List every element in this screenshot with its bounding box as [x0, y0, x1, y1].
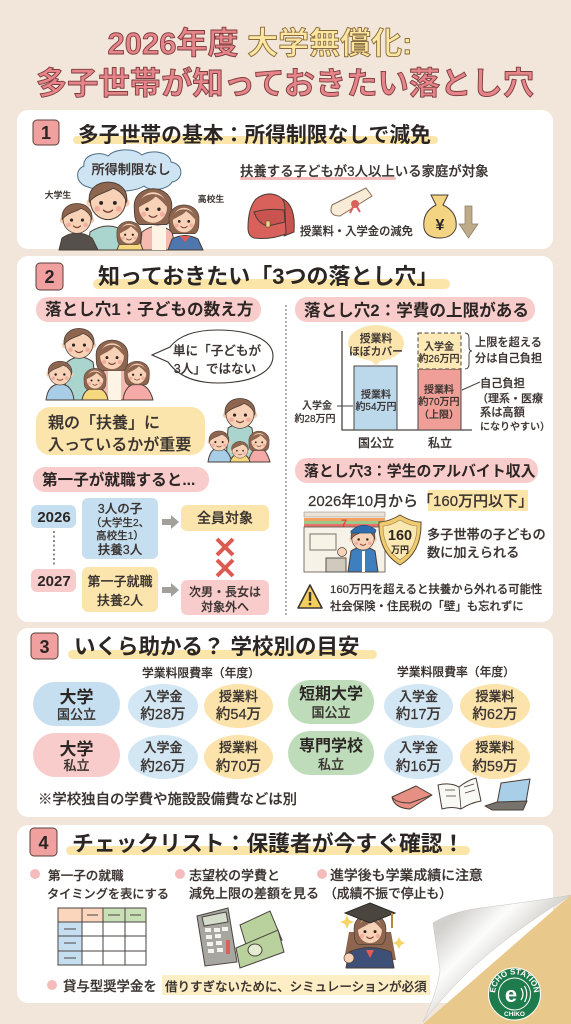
tuition bar chart: 自己負担: [480, 376, 525, 390]
section 2 badge: [36, 263, 63, 290]
tuition bar chart: 系は高額: [480, 405, 525, 419]
admission 16: 約16万: [396, 758, 441, 775]
convenience store with student worker: 7: [341, 518, 347, 530]
counted as children text: 数に加えられる: [427, 545, 519, 560]
tuition 62: 約62万: [472, 706, 518, 723]
checklist item 3: （成績不振で停止も）: [324, 886, 452, 901]
admission 26: 約26万: [140, 758, 186, 775]
reduction text: 授業料・入学金の減免: [300, 224, 413, 238]
convenience store with student worker: [304, 512, 385, 572]
section 3 heading: いくら助かる？ 学校別の目安: [74, 635, 359, 659]
icon: closed book: [392, 786, 432, 809]
tuition bar chart: ほぼカバー: [349, 345, 403, 358]
warning text: 社会保険・住民税の「壁」も忘れずに: [330, 599, 524, 613]
out of scope box: 対象外へ: [201, 599, 249, 614]
cloud: income limit: 所得制限なし: [91, 162, 171, 177]
university national: [33, 682, 120, 726]
section 4 badge: 4: [38, 833, 49, 853]
parent with children: [208, 399, 270, 462]
checklist item 1: 第一子の就職: [48, 868, 124, 883]
tuition bar chart: 分は自己負担: [475, 351, 542, 365]
panel 3: estimates: [17, 628, 553, 817]
year 2026: 2026: [37, 509, 71, 526]
loan simulation note: 借りすぎないために、シミュレーションが必須: [165, 979, 427, 994]
counted as children text: [427, 526, 546, 560]
section 4 heading: チェックリスト：保護者が今すぐ確認！: [72, 831, 464, 856]
tuition 70: [204, 735, 273, 779]
first child employed heading: [33, 467, 209, 492]
admission 17: [384, 684, 453, 728]
first child employed heading: 第一子が就職すると...: [42, 470, 195, 489]
vocational school private: 私立: [318, 757, 344, 772]
tuition bar chart: 上限を超える: [475, 335, 542, 349]
admission 26: [128, 735, 198, 779]
university national: 大学: [60, 687, 94, 707]
first child employed box: [82, 567, 158, 612]
vocational school private: [288, 731, 374, 775]
year 2026: [31, 505, 76, 528]
vocational school private: 専門学校: [299, 736, 363, 755]
tuition 70: 約70万: [216, 758, 261, 775]
junior college national: 国公立: [311, 705, 351, 720]
tuition bar chart: 入学金: [424, 340, 454, 353]
section 2 badge: 2: [44, 267, 55, 287]
footnote: ※学校独自の学費や施設設備費などは別: [38, 791, 297, 808]
out of scope box: [181, 580, 269, 615]
icon: diploma: [331, 188, 372, 216]
pitfall 3 heading: 落とし穴3：学生のアルバイト収入: [304, 462, 536, 480]
red cross marks: [217, 539, 233, 576]
tuition bar chart: 授業料: [360, 331, 392, 345]
panel 1: basics: [17, 110, 553, 250]
admission 28: [128, 684, 198, 728]
year 2027: 2027: [37, 573, 71, 590]
three children box: 3人の子: [98, 502, 142, 516]
table icon: [58, 908, 146, 965]
title: 2026年度 大学無償化:: [108, 26, 412, 61]
counted as children text: 多子世帯の子どもの: [427, 526, 546, 542]
family illustration: [59, 182, 203, 250]
tuition 70: 授業料: [219, 740, 258, 755]
arrow: [162, 515, 179, 529]
icon: shield 160: 万円: [391, 545, 409, 555]
checklist item 1: [30, 868, 169, 901]
graduate student icon: [340, 903, 405, 968]
checklist item 3: [317, 867, 483, 901]
section 3 badge: 3: [39, 637, 50, 657]
tuition 62: [460, 684, 530, 728]
tuition bar chart: 入学金: [302, 399, 332, 412]
icon: laptop: [485, 779, 530, 810]
loan simulation note: [47, 975, 430, 995]
junior college national: [288, 680, 374, 724]
warning text: 160万円を超えると扶養から外れる可能性: [330, 582, 542, 596]
dependent callout: [36, 407, 205, 455]
checklist item 2: [175, 868, 319, 901]
tuition bar chart: （理系・医療: [477, 391, 543, 405]
section 1 badge: [33, 120, 59, 145]
admission 28: 約28万: [140, 706, 186, 723]
icon: shield 160: [379, 515, 421, 565]
tuition 59: [460, 735, 530, 779]
tuition bar chart: 約54万円: [355, 400, 397, 413]
speech bubble: [152, 330, 273, 383]
first child employed box: 扶養2人: [97, 593, 143, 608]
label: university student: 大学生: [45, 189, 71, 200]
admission 17: 約17万: [396, 706, 441, 723]
tuition 59: 約59万: [472, 758, 518, 775]
tuition 54: [204, 684, 273, 728]
university private: 大学: [60, 739, 94, 759]
section 2 heading: 知っておきたい「3つの落とし穴」: [98, 264, 438, 289]
column caption left: 学業料限費率（年度）: [142, 666, 260, 680]
tuition bar chart: 約26万円: [418, 352, 460, 365]
admission 16: 入学金: [399, 740, 438, 755]
year 2027: [31, 569, 76, 592]
icon: yen money bag: [424, 195, 456, 238]
tuition 54: 授業料: [219, 689, 258, 704]
panel 2: three pitfalls: [17, 256, 553, 622]
out of scope box: 次男・長女は: [189, 584, 261, 599]
tuition 62: 授業料: [475, 689, 515, 704]
tuition 59: 授業料: [475, 740, 515, 755]
tuition bar chart: 約70万円: [418, 395, 460, 408]
three children box: 扶養3人: [98, 542, 143, 557]
underlined target text: 扶養する子どもが3人以上いる家庭が対象: [240, 163, 488, 179]
first child employed box: 第一子就職: [87, 574, 153, 589]
date limit: 2026年10月から「160万円以下」: [308, 493, 533, 510]
admission 17: 入学金: [399, 689, 438, 704]
panel 4: checklist: [17, 825, 553, 1003]
icon: down arrow: [459, 206, 478, 238]
icon: school backpack: [248, 194, 294, 238]
three children box: [82, 498, 158, 559]
loan simulation note: 貸与型奨学金を: [63, 979, 157, 994]
logo: Echo Station Chiko: ECHO STATION: [490, 968, 540, 992]
page curl: [423, 895, 571, 1024]
tuition bar chart: 国公立: [358, 436, 394, 450]
logo: Echo Station Chiko: [488, 968, 541, 1020]
warning text: [330, 582, 542, 613]
university private: 私立: [63, 758, 90, 773]
section 4 badge: [30, 828, 57, 856]
tuition bar chart: [294, 325, 550, 450]
title: [36, 26, 534, 101]
icon: yen money bag: ¥: [436, 217, 445, 234]
all eligible: 全員対象: [197, 510, 253, 526]
family with three children: [46, 329, 153, 400]
label: high school student: 高校生: [198, 193, 224, 204]
tuition bar chart: 約28万円: [294, 412, 336, 425]
icon: open book: [438, 778, 481, 809]
speech bubble: 3人」ではない: [174, 362, 256, 376]
tuition 54: 約54万: [216, 706, 261, 723]
dependent callout: 入っているかが重要: [48, 435, 191, 454]
speech bubble: 単に「子どもが: [173, 343, 261, 358]
pitfall 2 heading: 落とし穴2：学費の上限がある: [304, 300, 529, 320]
column caption right: 学業料限費率（年度）: [397, 665, 515, 679]
logo: Echo Station Chiko: CHIKO: [504, 1011, 525, 1018]
icon: shield 160: 160: [388, 528, 412, 544]
title: 多子世帯が知っておきたい落とし穴: [36, 65, 534, 101]
timeline connector: [53, 531, 55, 566]
all eligible: [181, 505, 269, 531]
checklist item 1: タイミングを表にする: [47, 886, 169, 901]
section 1 badge: 1: [41, 123, 51, 143]
section 1 heading: 多子世帯の基本：所得制限なしで減免: [78, 123, 431, 147]
tuition bar chart: 授業料: [424, 383, 454, 396]
pitfall 1 heading: 落とし穴1：子どもの数え方: [45, 299, 253, 319]
cloud: income limit: [78, 150, 181, 191]
checklist item 2: 減免上限の差額を見る: [189, 886, 319, 901]
junior college national: 短期大学: [299, 684, 363, 703]
calculator and banknotes icon: [197, 908, 284, 968]
admission 26: 入学金: [143, 740, 183, 755]
logo: Echo Station Chiko: e: [505, 982, 517, 1007]
dependent callout: 親の「扶養」に: [48, 414, 160, 432]
tuition bar chart: 授業料: [361, 388, 391, 401]
three children box: 高校生1）: [96, 529, 144, 542]
tuition bar chart: 私立: [428, 436, 452, 450]
admission 28: 入学金: [143, 689, 183, 704]
checklist item 2: 志望校の学費と: [189, 868, 280, 883]
section 3 badge: [31, 633, 58, 659]
tuition bar chart: （上限）: [419, 409, 459, 421]
admission 16: [384, 735, 453, 779]
university national: 国公立: [57, 707, 96, 722]
university private: [33, 733, 120, 777]
icon: warning triangle: [298, 585, 322, 608]
checklist item 3: 進学後も学業成績に注意: [330, 867, 483, 883]
tuition bar chart: になりやすい）: [480, 421, 550, 433]
arrow: [162, 583, 179, 597]
three children box: （大学生2、: [91, 516, 149, 529]
pitfall 3 heading: [295, 458, 538, 483]
